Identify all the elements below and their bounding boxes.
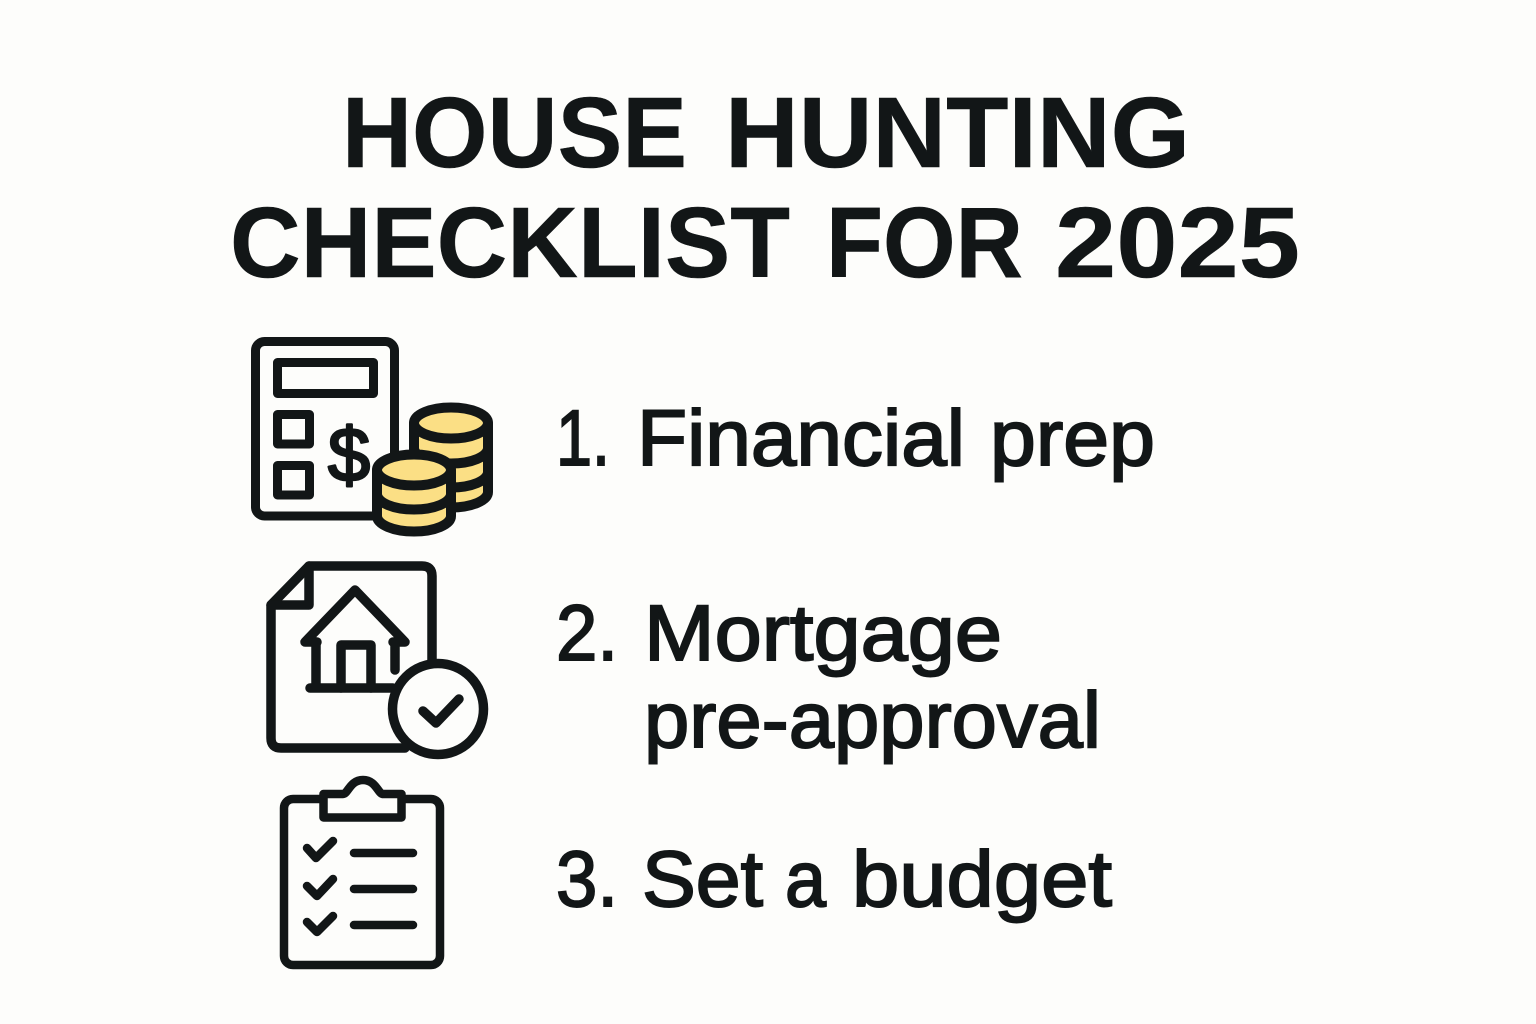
item 1 label (556, 393, 1155, 482)
document outline (271, 566, 432, 748)
title (230, 77, 1300, 299)
calculator key top (278, 414, 310, 444)
rear coin stack (414, 408, 488, 508)
board (284, 799, 440, 965)
item 2 label: 2. (556, 588, 618, 677)
folded corner (271, 566, 309, 605)
item 2 label (556, 588, 1101, 764)
clip (324, 780, 402, 818)
front coin stack (377, 454, 451, 532)
title: 2025 (1055, 187, 1300, 299)
item 3 label: budget (852, 834, 1112, 923)
title: HOUSE (342, 77, 687, 189)
item 1 label: Financial (637, 393, 965, 482)
title: HUNTING (725, 77, 1190, 189)
item 2 label: pre-approval (644, 675, 1101, 764)
item 3 label: a (785, 834, 826, 923)
dollar sign: $ (328, 413, 370, 498)
item 3 label: Set (642, 834, 763, 923)
check rows (307, 841, 413, 932)
calculator body (256, 342, 394, 516)
item 1 label: prep (990, 393, 1155, 482)
title: CHECKLIST (230, 187, 790, 299)
calculator key bottom (278, 466, 310, 495)
item 1 label: 1. (556, 393, 610, 482)
icon: calculator with coins (256, 342, 488, 532)
icon: house document with check badge (271, 566, 484, 754)
item 3 label (556, 834, 1112, 923)
calculator display (278, 362, 374, 394)
title: FOR (826, 187, 1023, 299)
house (305, 590, 405, 688)
icon: clipboard checklist (284, 780, 440, 965)
item 2 label: Mortgage (644, 588, 1002, 677)
check badge (392, 664, 484, 754)
item 3 label: 3. (556, 834, 618, 923)
